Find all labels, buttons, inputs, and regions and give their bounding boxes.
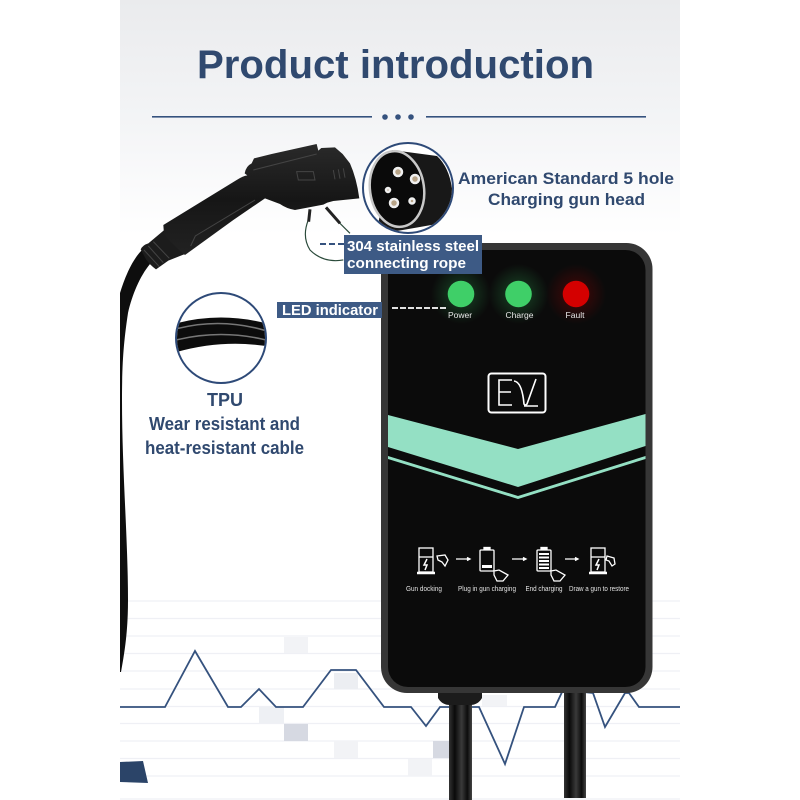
- TPU caption: TPU: [207, 390, 243, 410]
- EV logo: [488, 374, 546, 412]
- LED power: [448, 281, 474, 307]
- arrow 3: [565, 558, 578, 560]
- chevron thin line: [388, 456, 646, 499]
- connector detail circle: [363, 143, 453, 233]
- charging steps labels: [406, 586, 629, 593]
- arrow 1: [456, 558, 470, 560]
- navy corner block: [120, 761, 148, 783]
- icon: gun docking: [417, 548, 448, 573]
- LED charge: [505, 281, 532, 307]
- connector ring: [368, 150, 426, 228]
- connector caption: American Standard 5 hole: [458, 169, 674, 188]
- left power cables: [438, 685, 586, 800]
- connector caption: Charging gun head: [488, 190, 645, 209]
- icon: plug in gun charging: [480, 548, 508, 581]
- LED fault: [563, 281, 589, 307]
- TPU cable detail circle: [170, 293, 272, 383]
- charging steps icons: [417, 548, 615, 581]
- charger casing: [381, 243, 652, 693]
- charging steps labels: End charging: [526, 586, 563, 593]
- rope callout label: 304 stainless steel: [347, 238, 479, 255]
- charger front face: [388, 250, 646, 687]
- steel rope: [305, 220, 350, 261]
- charging gun and cable: [118, 144, 359, 672]
- cable highlights: [172, 323, 270, 341]
- background panel: [120, 0, 680, 235]
- title: Product introduction: [197, 43, 594, 87]
- icon: end charging: [537, 548, 565, 581]
- title divider: [152, 114, 646, 120]
- waveform line: [120, 651, 680, 764]
- cable: [118, 250, 150, 672]
- wallbox charger: [381, 243, 652, 693]
- LED labels: Fault: [566, 310, 585, 320]
- chevron band: [388, 414, 646, 487]
- TPU caption: Wear resistant and: [149, 414, 300, 434]
- LED labels: Power: [448, 310, 472, 320]
- connector body: [378, 150, 453, 231]
- LED glows: [431, 264, 606, 324]
- pins: [386, 168, 419, 207]
- gun body: [163, 144, 359, 255]
- LED callout dash: [392, 307, 448, 309]
- strain relief: [141, 229, 185, 269]
- icon: draw a gun to restore: [589, 548, 615, 573]
- LED labels: [448, 310, 585, 320]
- gun highlights: [144, 154, 345, 267]
- LED labels: Charge: [506, 310, 534, 320]
- TPU caption: heat-resistant cable: [145, 438, 304, 458]
- connector caption: [458, 169, 674, 209]
- rope callout dash: [320, 243, 344, 245]
- charging steps labels: Gun docking: [406, 586, 442, 593]
- TPU caption: [145, 390, 304, 458]
- charging steps labels: Draw a gun to restore: [569, 586, 629, 593]
- rope callout label: [344, 235, 482, 274]
- rope clips: [309, 207, 340, 223]
- cable cross-section: [177, 318, 265, 352]
- rope callout label: connecting rope: [347, 255, 466, 272]
- LED indicator label: LED indicator: [282, 303, 378, 319]
- arrow 2: [512, 558, 526, 560]
- decorative squares: [259, 637, 507, 776]
- charging steps labels: Plug in gun charging: [458, 586, 516, 593]
